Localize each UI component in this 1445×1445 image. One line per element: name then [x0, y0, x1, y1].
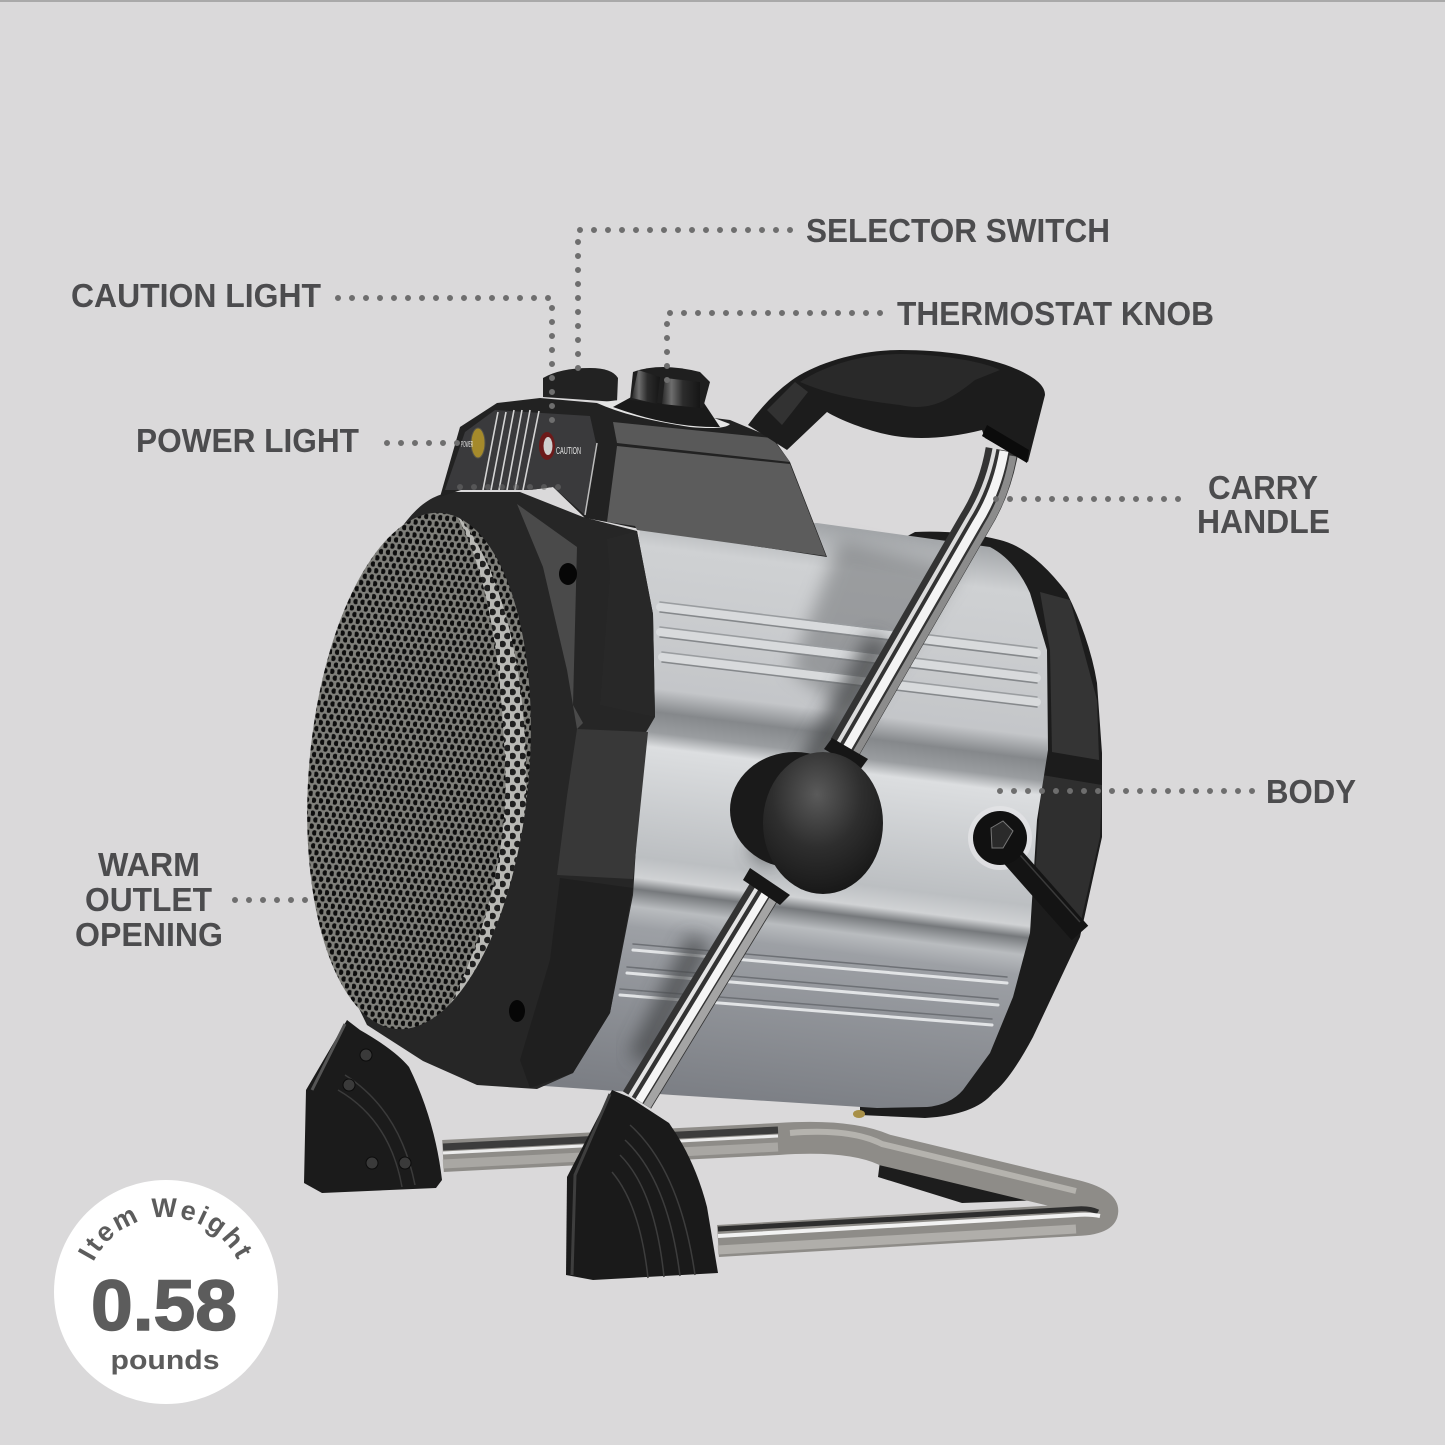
brass screw: [853, 1110, 865, 1118]
front housing ring: [340, 492, 655, 1089]
label: thermostat knob: THERMOSTAT KNOB: [897, 295, 1214, 332]
top edge line: [0, 0, 1445, 2]
label: warm outlet opening: WARM: [98, 846, 200, 883]
carry handle: [630, 350, 1045, 1106]
front foot: [566, 1090, 718, 1280]
leader: power light lower stub: [460, 484, 560, 490]
label: carry handle: CARRY: [1208, 469, 1318, 506]
label: carry handle: [1197, 469, 1330, 540]
product: heater: [287, 350, 1102, 1280]
leader: power light: [387, 440, 458, 446]
pivot ball: [730, 738, 883, 905]
label: power light: POWER LIGHT: [136, 422, 359, 459]
badge curved heading: Item Weight: [78, 1198, 252, 1261]
badge: item weight: [54, 1180, 278, 1404]
rear foot: [304, 1020, 442, 1193]
caution light: CAUTION: [556, 446, 581, 457]
control housing: [440, 398, 827, 557]
leader: selector switch: [578, 230, 790, 375]
caution light: [539, 432, 581, 460]
badge value: 0.58: [91, 1267, 237, 1346]
power light: POWER: [461, 440, 473, 449]
label: warm outlet opening: [75, 846, 223, 953]
badge unit: pounds: [110, 1345, 220, 1375]
label: warm outlet opening: OUTLET: [85, 881, 212, 918]
label: warm outlet opening: OPENING: [75, 916, 223, 953]
label: body: BODY: [1266, 773, 1356, 810]
silver body: [530, 523, 1048, 1108]
leader: carry handle: [990, 496, 1178, 502]
label: caution light: CAUTION LIGHT: [71, 277, 321, 314]
leader: caution light: [338, 298, 552, 430]
power cord and grommet: [968, 806, 1080, 933]
selector switch knob: [543, 368, 618, 402]
upper chrome tube: [845, 450, 1002, 747]
power light: [461, 428, 485, 458]
body ribs: [620, 540, 1037, 1060]
vent lines: [483, 410, 539, 490]
leader: warm outlet opening: [235, 897, 312, 903]
heater base rails: [443, 1130, 1102, 1250]
heater rear rim: [860, 532, 1102, 1118]
grille mesh: [307, 512, 531, 1030]
label: selector switch: SELECTOR SWITCH: [806, 212, 1110, 249]
lower chrome tube: [637, 887, 767, 1100]
leader: body: [995, 788, 1252, 794]
rear rim facets: [1034, 592, 1102, 925]
thermostat knob: [597, 367, 730, 428]
leader: thermostat knob: [667, 313, 880, 385]
label: carry handle: HANDLE: [1197, 503, 1330, 540]
